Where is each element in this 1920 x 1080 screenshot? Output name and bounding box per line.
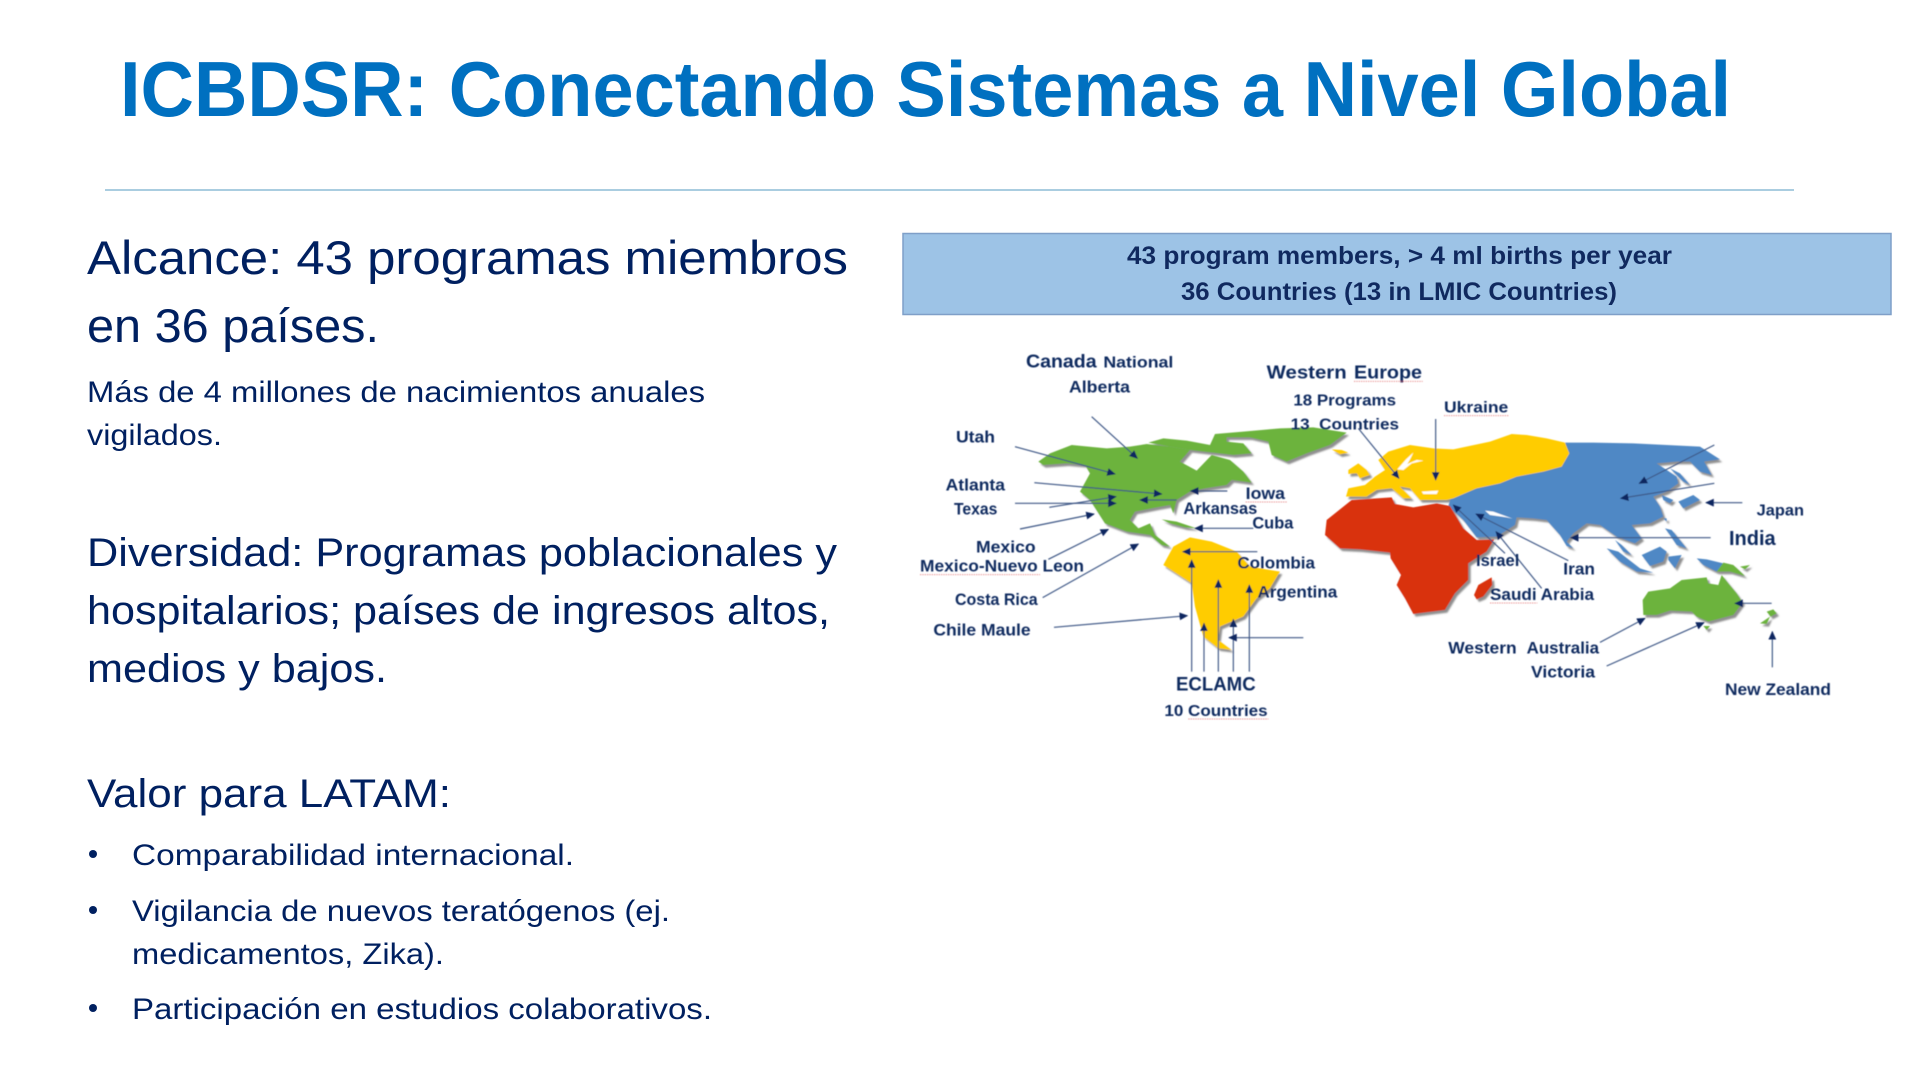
kamchatka <box>1690 460 1712 475</box>
label: Texas: Texas <box>954 499 997 518</box>
arrow: Chile Maule <box>1054 616 1187 627</box>
text block: diversidad: hospitalarios; países de ingresos altos, <box>87 589 830 633</box>
label: Ukraine: Ukraine <box>1444 400 1508 417</box>
japan <box>1678 495 1700 508</box>
new guinea east <box>1717 563 1750 576</box>
label: Western Europe: Western <box>1267 361 1347 382</box>
label: Argentina: Argentina <box>1257 583 1338 602</box>
madagascar <box>1474 577 1492 599</box>
label: Costa Rica: Costa Rica <box>955 590 1038 609</box>
label: Chile Maule: Chile Maule <box>933 621 1031 640</box>
label: Cuba: Cuba <box>1252 514 1294 533</box>
label: India: India <box>1729 528 1777 550</box>
bullet list <box>89 839 712 1026</box>
label: 10 Countries: 10 Countries <box>1164 703 1268 720</box>
label: Western Australia: Australia <box>1527 638 1600 657</box>
label: Western Australia: Western <box>1448 638 1517 657</box>
arrow: Colombia <box>1183 550 1257 553</box>
banner <box>903 234 1891 314</box>
label: Utah: Utah <box>956 428 995 447</box>
label: Western Europe: Europe <box>1354 361 1422 382</box>
arrow: Texas 2 <box>1049 497 1116 507</box>
arrow: ECLAMC 4 <box>1232 619 1235 672</box>
label: Western Australia <box>1448 638 1600 657</box>
label: Colombia: Colombia <box>1237 553 1316 572</box>
label: New Zealand: New Zealand <box>1725 680 1831 699</box>
arrow: Costa Rica <box>1043 544 1138 598</box>
arrow: Western Australia <box>1600 618 1645 642</box>
arrow: Victoria <box>1607 623 1704 666</box>
europe and russia <box>1346 434 1569 500</box>
text block: alcance <box>87 231 848 452</box>
arrow: ECLAMC 2 <box>1202 623 1206 672</box>
map arrows <box>1015 417 1772 672</box>
map labels <box>920 351 1831 720</box>
bullet list: Comparabilidad internacional. <box>132 839 574 872</box>
arrow: Saudi Arabia <box>1496 532 1542 588</box>
arrow: China <box>1621 483 1714 498</box>
label: Israel: Israel <box>1476 551 1519 570</box>
americas land masses <box>1038 427 1347 650</box>
label: Saudi Arabia: Saudi <box>1490 585 1537 604</box>
north america <box>1038 444 1252 547</box>
new zealand <box>1760 609 1777 624</box>
arrow: ECLAMC 1 <box>1190 560 1193 672</box>
arrow: Mexico-Nuevo Leon <box>1048 529 1108 559</box>
label: Western Europe <box>1267 361 1423 382</box>
arrow: Utah <box>1015 447 1115 474</box>
label: Mexico: Mexico <box>976 538 1036 557</box>
banner: 36 Countries (13 in LMIC Countries) <box>1181 278 1617 306</box>
arrow: India <box>1571 536 1711 539</box>
arrow: Cuba <box>1195 527 1253 530</box>
text block: alcance: Alcance: 43 programas miembros <box>87 231 848 284</box>
philippines <box>1663 518 1687 548</box>
text block: alcance: en 36 países. <box>87 299 379 352</box>
text block: diversidad <box>87 531 837 691</box>
arctic islands and greenland <box>1148 427 1347 462</box>
banner: 43 program members, > 4 ml births per year <box>1127 242 1672 270</box>
text block: diversidad: medios y bajos. <box>87 647 387 691</box>
new guinea west <box>1697 558 1723 572</box>
arrow: ECLAMC 5 <box>1248 585 1251 672</box>
arrow: Iran <box>1476 514 1568 561</box>
africa <box>1325 497 1494 614</box>
label: ECLAMC: ECLAMC <box>1176 675 1256 696</box>
arrow: Texas <box>1015 502 1116 505</box>
arrow: Israel <box>1453 505 1505 553</box>
label: Atlanta: Atlanta <box>946 476 1006 495</box>
label: Iran: Iran <box>1563 559 1595 578</box>
eurasia, africa and oceania land masses <box>1325 434 1777 630</box>
label: Arkansas: Arkansas <box>1183 499 1257 518</box>
label: 13 Countries: 13 Countries <box>1291 416 1399 433</box>
label: Canada National <box>1026 351 1173 372</box>
world map <box>920 351 1831 720</box>
label: Saudi Arabia <box>1490 585 1595 604</box>
bullet list: Participación en estudios colaborativos. <box>132 993 712 1026</box>
cuba <box>1162 519 1197 528</box>
label: Saudi Arabia: Arabia <box>1541 585 1595 604</box>
title: ICBDSR: Conectando Sistemas a Nivel Global <box>120 45 1731 133</box>
british isles <box>1348 463 1370 478</box>
arrow: Canada <box>1092 417 1137 458</box>
arrow: New Zealand <box>1771 632 1774 667</box>
text block: valor para LATAM <box>87 772 712 1026</box>
arrow: ECLAMC 3 <box>1217 580 1220 672</box>
label: Iowa: Iowa <box>1246 484 1286 503</box>
inland water gaps <box>1397 453 1513 519</box>
arrow: Japan <box>1706 501 1742 504</box>
label: Canada National: National <box>1103 355 1173 372</box>
tasmania <box>1703 626 1710 630</box>
arrow: Mexico <box>1020 514 1094 529</box>
arrow: Iowa <box>1191 489 1227 493</box>
text block: alcance: Más de 4 millones de nacimientos anuales <box>87 376 705 409</box>
sumatra and malaya <box>1607 540 1653 573</box>
label: Canada National: Canada <box>1026 351 1097 372</box>
text block: alcance: vigilados. <box>87 419 222 452</box>
bullet list: medicamentos, Zika). <box>132 938 444 971</box>
text block: diversidad: Diversidad: Programas poblacionales y <box>87 531 837 575</box>
south america <box>1163 537 1280 650</box>
asia <box>1448 443 1720 548</box>
arrow: Australia east <box>1735 602 1772 605</box>
label: Alberta: Alberta <box>1069 377 1131 396</box>
heading: valor para LATAM: Valor para LATAM: <box>87 772 451 816</box>
label: Victoria: Victoria <box>1531 663 1596 682</box>
arrow: China north <box>1639 445 1714 483</box>
australia <box>1643 575 1743 622</box>
label: Japan: Japan <box>1757 503 1804 520</box>
bullet list: Vigilancia de nuevos teratógenos (ej. <box>132 895 670 928</box>
arrow: Western Europe <box>1358 428 1399 478</box>
sakhalin and korea <box>1662 468 1690 503</box>
iceland <box>1332 449 1348 454</box>
label: 18 Programs: 18 Programs <box>1293 392 1396 409</box>
arrow: Atlanta <box>1034 483 1162 494</box>
arrow: Argentina <box>1229 636 1303 639</box>
label: Mexico-Nuevo Leon: Mexico-Nuevo Leon <box>920 557 1084 576</box>
arrow: Ukraine <box>1434 419 1437 480</box>
arrow: Arkansas <box>1140 498 1177 502</box>
borneo and sulawesi <box>1642 547 1682 568</box>
